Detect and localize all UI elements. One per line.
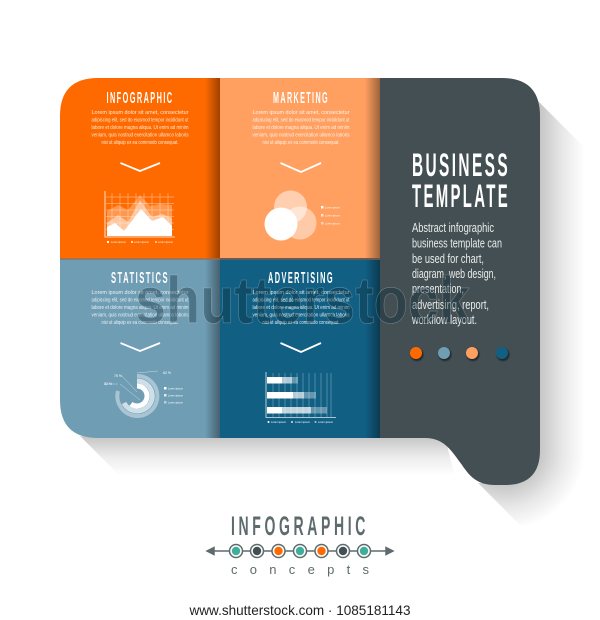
legend: Lorem ipsum xyxy=(168,400,183,404)
text block: advertising: adipiscing elit, sed do eiusmod tempor incididunt ut xyxy=(252,298,350,304)
bar chart xyxy=(266,372,336,424)
venn diagram xyxy=(264,190,340,240)
panel: statistics: STATISTICS xyxy=(111,270,169,287)
text block: marketing: veniam, quis nostrud exercitation ullamco laboris xyxy=(252,132,350,138)
icon: chevron xyxy=(280,163,321,172)
icon: chevron xyxy=(280,343,321,352)
long shadow: bottom xyxy=(80,436,455,477)
legend: Lorem ipsum xyxy=(325,214,340,218)
value labels: 82 % xyxy=(104,382,112,386)
text block: infographic: labore et dolore magna aliqua. Ut enim ad minim xyxy=(92,125,189,131)
legend: Lorem ipsum xyxy=(325,206,340,210)
long shadow: right xyxy=(535,100,585,450)
heading: business template xyxy=(412,147,510,214)
text block: description: business template can xyxy=(412,236,502,250)
text block: statistics: labore et dolore magna aliqua. Ut enim ad minim xyxy=(92,305,189,311)
panel: business template xyxy=(380,78,540,485)
logo: infographic concepts xyxy=(207,511,393,577)
watermark: shutterstock xyxy=(135,263,470,337)
legend xyxy=(164,386,183,404)
panel: infographic: INFOGRAPHIC xyxy=(106,90,174,107)
text block: statistics xyxy=(92,290,189,326)
text block: infographic: nisi ut aliquip ex ea commodo consequat. xyxy=(102,140,179,146)
text block: description xyxy=(411,220,502,327)
area chart xyxy=(105,191,175,244)
footer: image id: www.shutterstock.com · 1085181143 xyxy=(189,602,411,618)
legend: Lorem ipsum xyxy=(325,222,340,226)
text block: description: presentation, xyxy=(412,281,464,296)
logo title: INFOGRAPHIC xyxy=(231,511,369,541)
text block: marketing: Lorem ipsum dolor sit amet, consectetur xyxy=(252,110,350,116)
legend xyxy=(268,420,333,424)
text block: advertising: Lorem ipsum dolor sit amet, consectetur xyxy=(252,290,350,296)
text block: statistics: Lorem ipsum dolor sit amet, consectetur xyxy=(92,290,189,296)
legend: Lorem ipsum xyxy=(158,240,173,244)
value labels xyxy=(104,371,171,386)
legend dots xyxy=(410,347,510,361)
legend: Lorem ipsum xyxy=(134,240,149,244)
text block: advertising: labore et dolore magna aliqua. Ut enim ad minim xyxy=(252,305,350,311)
text block: infographic: veniam, quis nostrud exercitation ullamco laboris xyxy=(92,132,189,138)
text block: marketing: adipiscing elit, sed do eiusmod tempor incididunt ut xyxy=(252,118,350,124)
legend: Lorem ipsum xyxy=(168,394,183,398)
legend: Lorem ipsum xyxy=(295,420,310,424)
text block: description: Abstract infographic xyxy=(412,220,494,235)
value labels: 62 % xyxy=(163,371,171,375)
text block: statistics: nisi ut aliquip ex ea commodo consequat. xyxy=(102,320,179,326)
text block: statistics: adipiscing elit, sed do eiusmod tempor incididunt ut xyxy=(92,298,189,304)
text block: marketing xyxy=(252,110,350,146)
text block: infographic: Lorem ipsum dolor sit amet, consectetur xyxy=(92,110,189,116)
text block: description: be used for chart, xyxy=(412,251,484,266)
panel: advertising: ADVERTISING xyxy=(268,270,334,287)
arrow line xyxy=(207,548,393,554)
long shadow: bottom right xyxy=(478,450,585,535)
text block: marketing: labore et dolore magna aliqua. Ut enim ad minim xyxy=(252,125,350,131)
panel: advertising xyxy=(220,258,380,438)
panel: marketing: MARKETING xyxy=(273,90,329,107)
text block: statistics: veniam, quis nostrud exercitation ullamco laboris xyxy=(92,312,189,318)
text block: marketing: nisi ut aliquip ex ea commodo consequat. xyxy=(262,140,340,146)
text block: advertising: veniam, quis nostrud exercitation ullamco laboris xyxy=(252,312,350,318)
legend: Lorem ipsum xyxy=(168,386,183,390)
logo subtitle: concepts xyxy=(231,562,370,577)
text block: advertising: nisi ut aliquip ex ea commodo consequat. xyxy=(262,320,340,326)
text block: description: diagram, web design, xyxy=(412,266,496,281)
timeline dots xyxy=(230,544,370,558)
value labels: 75 % xyxy=(114,374,122,378)
text block: advertising xyxy=(252,290,350,326)
text block: description: advertising, report, xyxy=(412,297,489,312)
icon: chevron xyxy=(120,163,160,171)
text block: infographic: adipiscing elit, sed do eiusmod tempor incididunt ut xyxy=(92,118,189,124)
legend xyxy=(321,206,340,226)
radial chart xyxy=(104,371,183,416)
panel: marketing xyxy=(220,78,380,258)
legend: Lorem ipsum xyxy=(271,420,286,424)
icon: chevron xyxy=(120,343,160,351)
legend xyxy=(107,240,173,244)
panel: statistics xyxy=(60,258,220,438)
legend: Lorem ipsum xyxy=(318,420,333,424)
panel: infographic xyxy=(60,78,220,258)
legend: Lorem ipsum xyxy=(111,240,126,244)
text block: description: workflow layout. xyxy=(411,312,477,327)
text block: infographic xyxy=(92,110,189,146)
